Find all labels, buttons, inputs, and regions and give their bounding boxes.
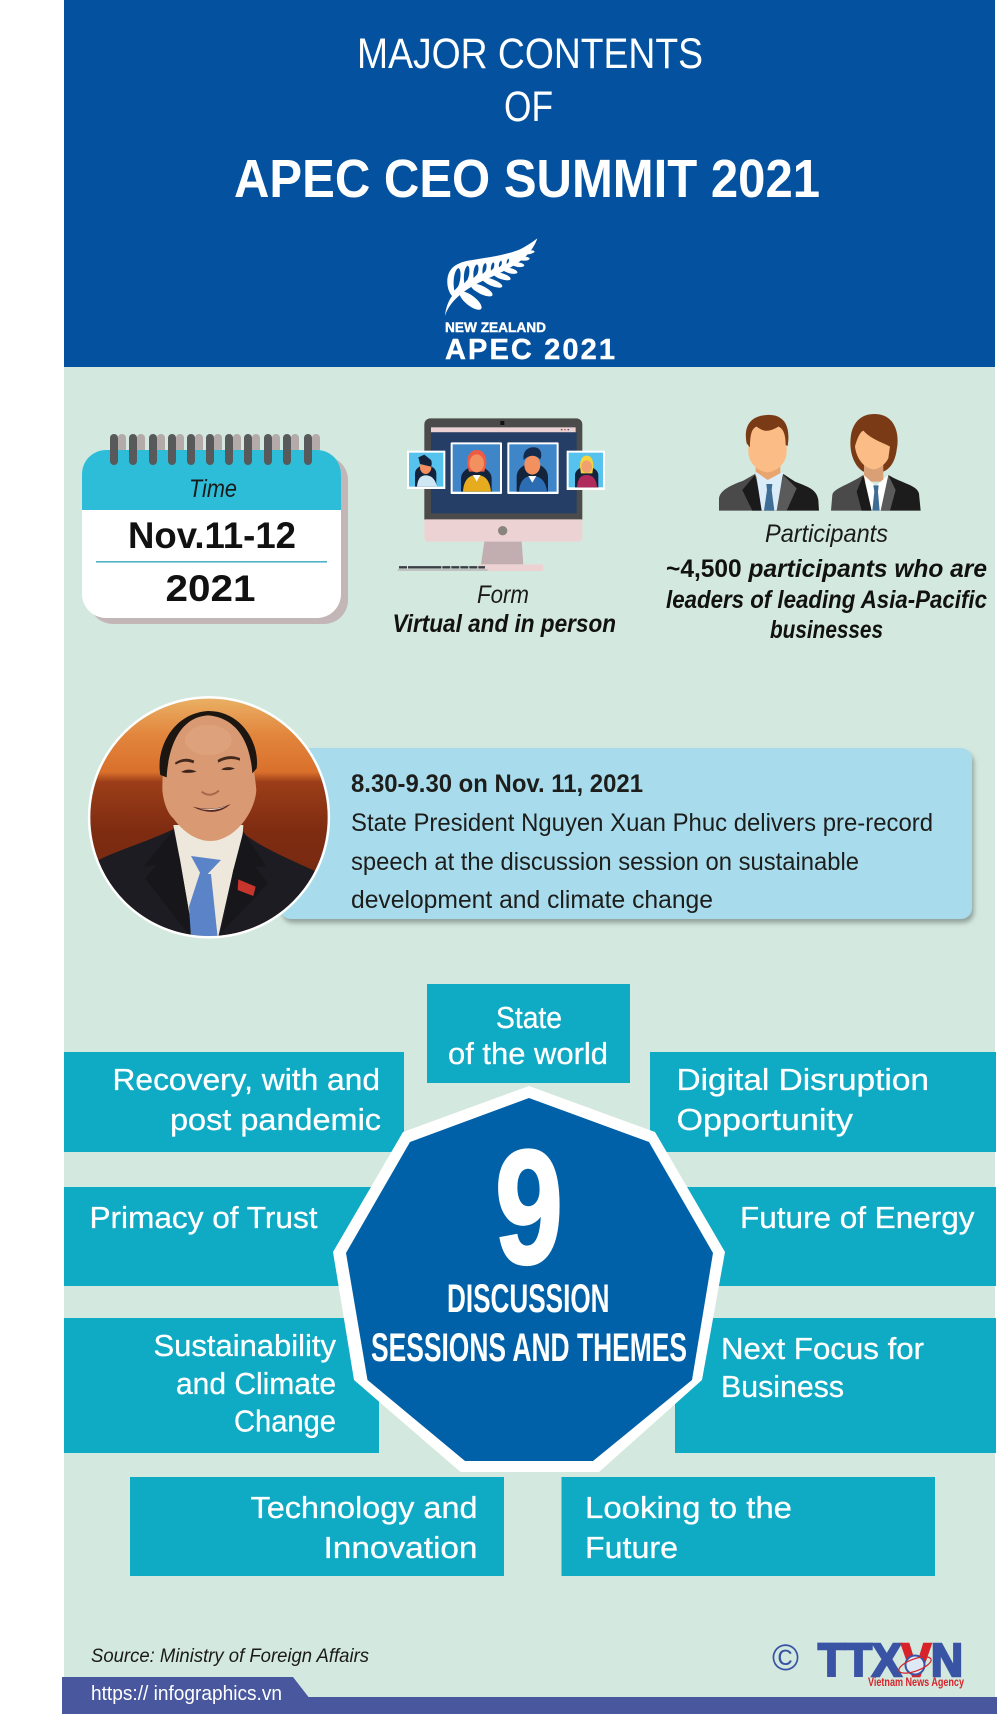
header band	[64, 0, 995, 367]
form value: Virtual and in person	[392, 610, 616, 638]
theme: technology	[130, 1477, 504, 1576]
logo: New Zealand APEC 2021	[445, 238, 615, 366]
panel: time calendar	[82, 434, 348, 624]
callout box	[280, 748, 972, 919]
video tile 4	[567, 451, 605, 490]
theme: sustainability	[64, 1318, 379, 1453]
theme: looking to the future: Looking to the	[585, 1490, 792, 1525]
footer bar	[62, 1677, 997, 1714]
theme: sustainability: and Climate	[176, 1366, 336, 1401]
title: of: OF	[504, 83, 553, 131]
portrait: state president	[85, 697, 338, 947]
form label: Form	[477, 581, 529, 609]
big number nine: 9	[495, 1117, 563, 1298]
theme: sustainability: Change	[234, 1404, 336, 1438]
title: APEC CEO Summit 2021: APEC CEO SUMMIT 2021	[234, 149, 820, 209]
calendar body	[82, 450, 341, 618]
icon: two business people	[719, 414, 921, 511]
callout text: State President Nguyen Xuan Phuc delivers pre-record	[351, 809, 933, 837]
theme: future of energy	[668, 1187, 996, 1286]
ring shadows	[118, 434, 320, 458]
theme: state of the world: State	[496, 1000, 562, 1035]
theme: digital disruption: Opportunity	[676, 1102, 854, 1137]
theme: next focus: Business	[721, 1369, 844, 1404]
woman	[831, 414, 921, 511]
website url: https:// infographics.vn	[91, 1683, 282, 1705]
calendar top	[82, 450, 341, 510]
callout text: speech at the discussion session on sustainable	[351, 848, 859, 876]
logo text: APEC 2021: APEC 2021	[445, 334, 615, 366]
theme: recovery	[64, 1052, 404, 1152]
theme: technology: Technology and	[250, 1490, 478, 1525]
calendar rings	[110, 434, 312, 465]
icon: silver fern	[445, 238, 537, 316]
participants description: businesses	[770, 616, 883, 644]
theme: primacy of trust	[64, 1187, 394, 1286]
central nonagon	[333, 1086, 725, 1472]
theme: recovery: post pandemic	[170, 1102, 381, 1137]
date: Nov.11-12	[128, 515, 296, 556]
theme: state of the world: of the world	[448, 1036, 608, 1071]
theme: digital disruption	[650, 1052, 996, 1152]
panel: participants	[666, 414, 987, 644]
theme: looking to the future	[562, 1477, 935, 1576]
callout text: development and climate change	[351, 886, 713, 914]
logo: TTXVN: Vietnam News Agency	[868, 1675, 964, 1689]
theme: primacy of trust: Primacy of Trust	[90, 1200, 318, 1235]
panel: discussion themes	[64, 984, 996, 1576]
theme: next focus	[675, 1318, 996, 1453]
panel: form	[392, 418, 616, 638]
participants label: Participants	[765, 520, 888, 548]
page background panel	[64, 367, 995, 1697]
calendar shadow	[89, 456, 348, 624]
callout date: 8.30-9.30 on Nov. 11, 2021	[351, 770, 643, 798]
participants description: ~4,500 participants who are	[666, 555, 987, 583]
video tile 1	[407, 451, 445, 489]
sessions and themes label: SESSIONS AND THEMES	[371, 1326, 687, 1370]
icon: video conference monitor	[398, 418, 605, 571]
callout text	[351, 809, 933, 914]
theme: recovery: Recovery, with and	[112, 1062, 380, 1097]
year: 2021	[166, 568, 256, 609]
source: Source: Ministry of Foreign Affairs	[91, 1646, 369, 1667]
theme: technology: Innovation	[324, 1530, 478, 1565]
theme: future of energy: Future of Energy	[740, 1200, 975, 1235]
logo: TTXVN: TTXVN	[818, 1634, 963, 1686]
theme: sustainability: Sustainability	[154, 1328, 336, 1363]
title: major contents: MAJOR CONTENTS	[357, 30, 703, 78]
video tile 2	[451, 442, 502, 494]
time label: Time	[189, 475, 237, 503]
logo text: New Zealand: NEW ZEALAND	[445, 319, 546, 335]
man	[719, 415, 819, 511]
theme: digital disruption: Digital Disruption	[676, 1062, 929, 1097]
discussion label: DISCUSSION	[447, 1277, 610, 1321]
copyright symbol: ©	[772, 1637, 799, 1678]
theme: state of the world	[427, 984, 630, 1083]
theme: next focus: Next Focus for	[721, 1331, 924, 1366]
callout: president speech	[280, 748, 972, 919]
theme: looking to the future: Future	[585, 1530, 678, 1565]
participants description	[666, 555, 987, 644]
video tile 3	[507, 442, 559, 494]
